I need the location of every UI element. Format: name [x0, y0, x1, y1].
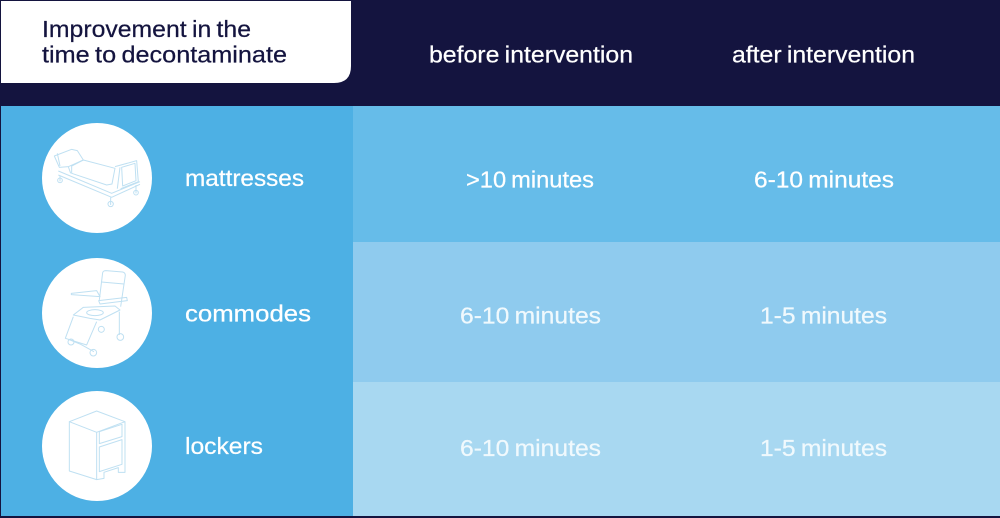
- value: commodes after: 1-5 minutes: [760, 302, 887, 328]
- label: lockers: lockers: [185, 433, 263, 459]
- title: [42, 16, 287, 68]
- icon: commode chair: [42, 258, 152, 368]
- icon: mattress bed: [42, 123, 152, 233]
- heading: after intervention: after intervention: [732, 42, 915, 68]
- value: lockers after: 1-5 minutes: [760, 435, 887, 461]
- panel: row commodes values: [353, 242, 1000, 382]
- heading: before intervention: before intervention: [429, 42, 633, 68]
- header band: [0, 0, 1000, 106]
- label: commodes: commodes: [185, 300, 311, 326]
- panel: row mattresses values: [353, 106, 1000, 242]
- icon: bedside locker: [42, 391, 152, 501]
- value: lockers before: 6-10 minutes: [460, 435, 601, 461]
- title: Improvement in the: [42, 16, 251, 42]
- value: commodes before: 6-10 minutes: [460, 302, 601, 328]
- title: time to decontaminate: [42, 42, 287, 68]
- label: mattresses: mattresses: [185, 165, 304, 191]
- panel: title box: [1, 1, 351, 83]
- panel: left category column: [1, 106, 353, 516]
- value: mattresses after: 6-10 minutes: [754, 166, 894, 192]
- panel: row lockers values: [353, 382, 1000, 516]
- value: mattresses before: >10 minutes: [466, 166, 594, 192]
